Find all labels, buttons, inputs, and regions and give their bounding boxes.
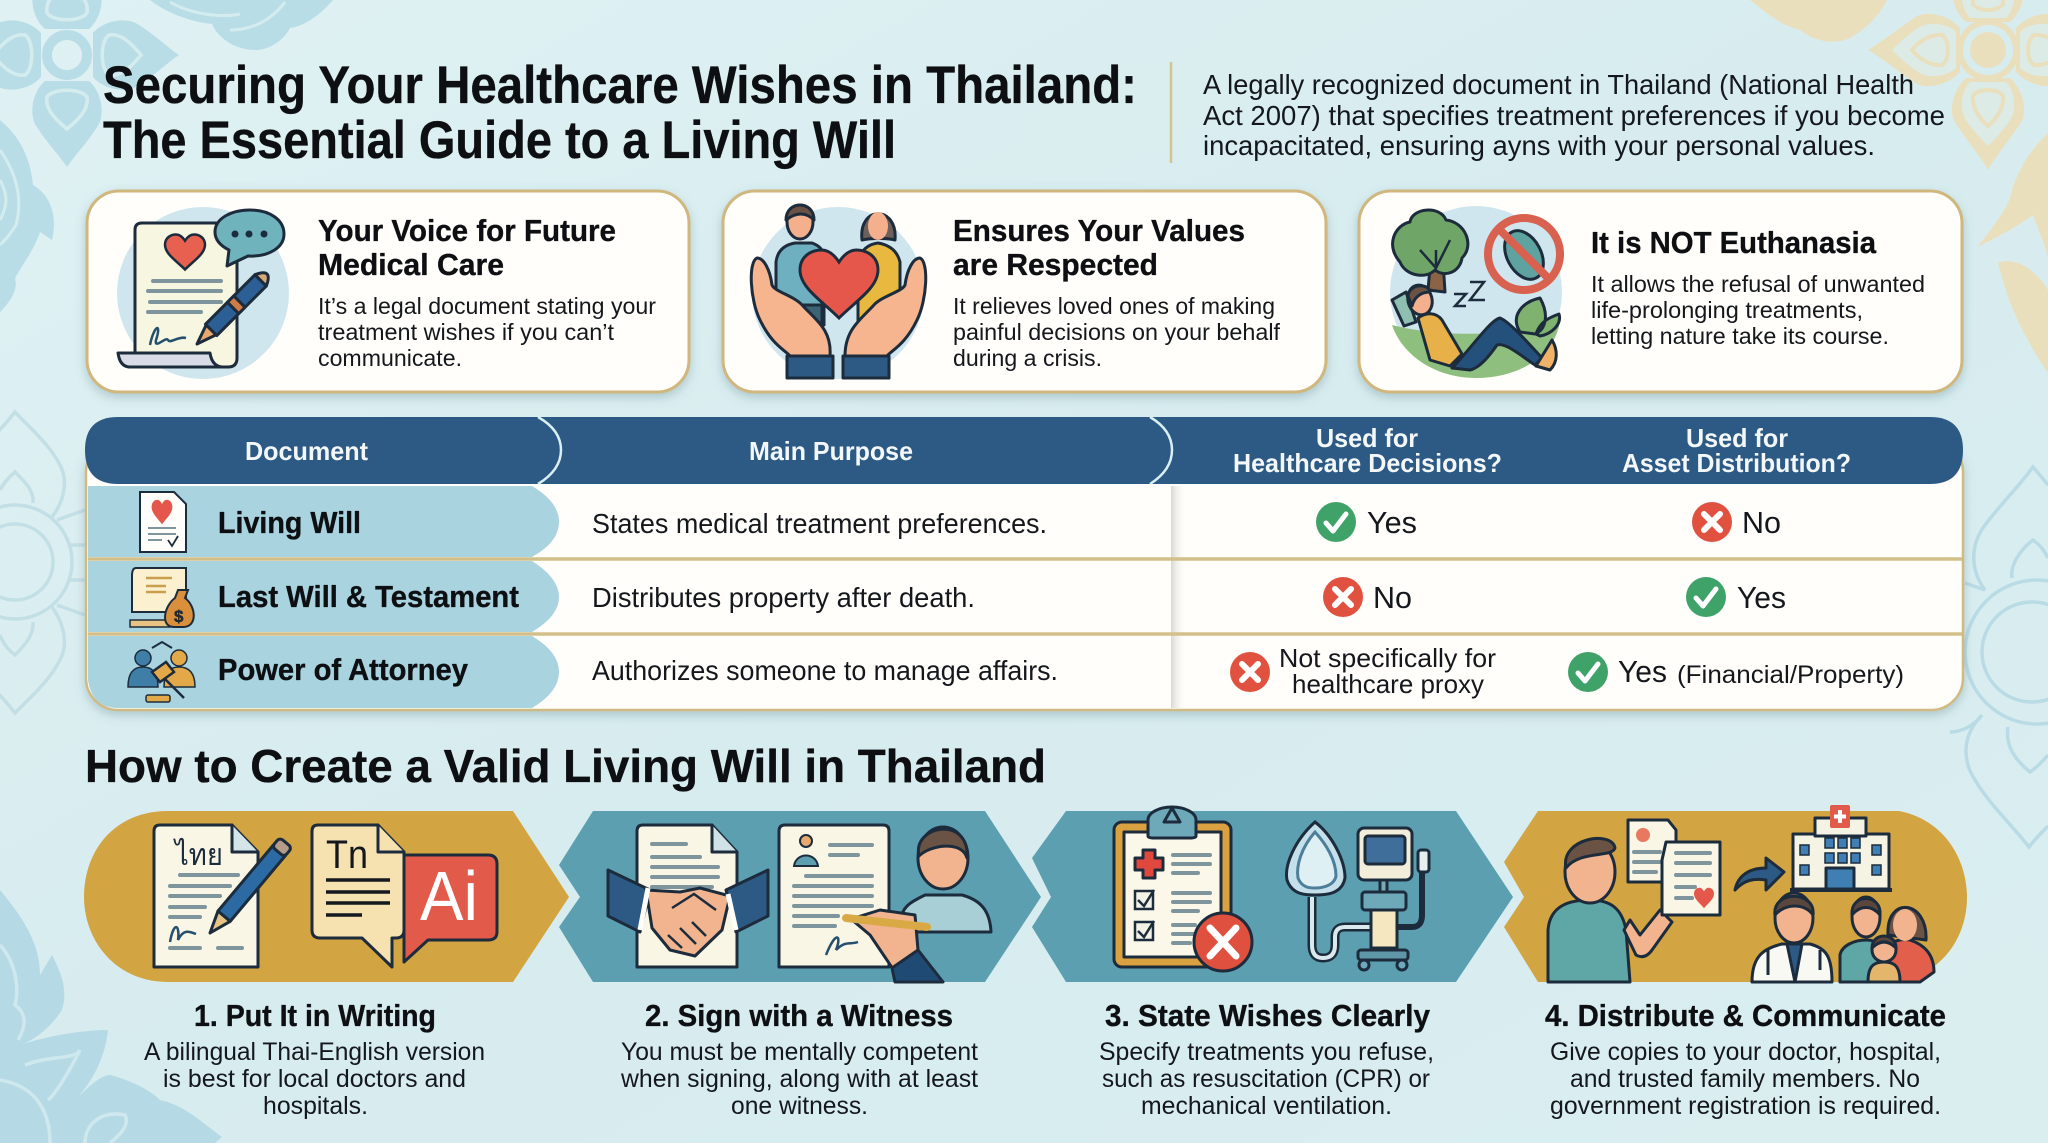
step 1 text — [144, 998, 485, 1120]
table header: Document — [245, 436, 368, 466]
body text: letting nature take its course. — [1591, 323, 1889, 349]
step 1 text: hospitals. — [263, 1092, 368, 1120]
body text — [318, 293, 656, 371]
step 3 text: such as resuscitation (CPR) or — [1102, 1065, 1430, 1093]
step 1: put it in writing — [84, 811, 569, 982]
step 4 text: and trusted family members. No — [1570, 1065, 1920, 1093]
panel: not euthanasia — [1359, 191, 1962, 392]
icon: scroll and money bag: $ — [174, 607, 184, 626]
body text — [1591, 271, 1925, 349]
step 2 text — [620, 998, 978, 1120]
icon: bilingual documents: Tn — [326, 833, 368, 877]
intro description: Act 2007) that specifies treatment preferences if you become — [1203, 100, 1945, 131]
table header: Used for — [1316, 423, 1418, 453]
row: power of attorney: healthcare proxy — [1292, 669, 1484, 699]
row: power of attorney: Yes — [1618, 654, 1667, 689]
table header: Asset Distribution? — [1622, 448, 1851, 478]
step 4 text — [1545, 998, 1946, 1120]
row: power of attorney: Power of Attorney — [218, 652, 469, 687]
row: last will: Yes — [1737, 580, 1786, 615]
table header — [85, 417, 1963, 484]
icon: sharing copies — [1548, 820, 1784, 982]
row: living will: States medical treatment preferences. — [592, 508, 1047, 539]
body text: painful decisions on your behalf — [953, 319, 1281, 345]
icon: doctor and family — [1752, 893, 1934, 982]
step 3 text: Specify treatments you refuse, — [1099, 1038, 1434, 1066]
step 1 text: A bilingual Thai-English version — [144, 1038, 485, 1066]
icon: bilingual documents: ไทย — [173, 837, 223, 872]
title: Securing Your Healthcare Wishes in Thailand: — [103, 56, 1137, 115]
row: last will: No — [1373, 580, 1412, 615]
icon: handshake and witness signing — [608, 825, 991, 982]
body text: It allows the refusal of unwanted — [1591, 271, 1925, 297]
step 2 text: You must be mentally competent — [621, 1038, 978, 1066]
row: living will: No — [1742, 505, 1781, 540]
body text: communicate. — [318, 345, 462, 371]
title: The Essential Guide to a Living Will — [103, 111, 896, 170]
body text: It relieves loved ones of making — [953, 293, 1275, 319]
comparison table — [85, 417, 1963, 710]
step 1 text: is best for local doctors and — [163, 1065, 466, 1093]
step 2 text: 2. Sign with a Witness — [645, 998, 953, 1033]
step 4 text: government registration is required. — [1550, 1092, 1941, 1120]
intro description: incapacitated, ensuring ayns with your personal values. — [1203, 130, 1875, 161]
body text: It’s a legal document stating your — [318, 293, 656, 319]
panel: your voice — [87, 191, 689, 392]
step 3: state wishes clearly — [1032, 807, 1513, 982]
heading: Ensures Your Values — [953, 213, 1245, 248]
table header: Healthcare Decisions? — [1233, 448, 1502, 478]
table header: Used for — [1686, 423, 1788, 453]
step 4 text: Give copies to your doctor, hospital, — [1550, 1038, 1941, 1066]
icon: document with pen and speech bubble — [117, 207, 289, 379]
body text — [953, 293, 1281, 371]
step 3 text: mechanical ventilation. — [1141, 1092, 1392, 1120]
title — [103, 56, 1137, 170]
step 2 text: when signing, along with at least — [620, 1065, 978, 1093]
step 2 text: one witness. — [731, 1092, 868, 1120]
row: living will: Yes — [1367, 505, 1417, 540]
row: last will: Distributes property after death. — [592, 582, 975, 613]
icon: living will document — [140, 492, 186, 552]
row: power of attorney: Not specifically for — [1279, 643, 1496, 673]
heading: It is NOT Euthanasia — [1591, 225, 1877, 260]
row: power of attorney: (Financial/Property) — [1677, 661, 1904, 689]
row: power of attorney — [128, 642, 1904, 702]
heading: Medical Care — [318, 247, 504, 282]
row: power of attorney: Authorizes someone to manage affairs. — [592, 655, 1058, 686]
body text: life-prolonging treatments, — [1591, 297, 1863, 323]
body text: during a crisis. — [953, 345, 1102, 371]
step 3 text — [1099, 998, 1434, 1120]
step 4: distribute and communicate — [1504, 805, 1967, 982]
heading: are Respected — [953, 247, 1158, 282]
heading — [318, 213, 616, 282]
icon: person resting under tree, no mask — [1390, 206, 1562, 378]
icon: bilingual documents — [154, 825, 497, 967]
intro description — [1171, 62, 1945, 163]
icon: two people with gavel — [128, 642, 195, 702]
heading — [953, 213, 1245, 282]
icon: hands holding heart and couple — [751, 205, 926, 379]
heading: Your Voice for Future — [318, 213, 616, 248]
step 2: sign with a witness — [559, 811, 1041, 982]
step 1 text: 1. Put It in Writing — [194, 998, 436, 1033]
icon: bilingual documents: Ai — [420, 857, 478, 935]
intro description: A legally recognized document in Thailand (National Health — [1203, 69, 1914, 100]
row: last will — [130, 568, 1786, 627]
step 3 text: 3. State Wishes Clearly — [1105, 998, 1431, 1033]
section heading: How to Create a Valid Living Will in Thailand — [85, 740, 1046, 792]
step 4 text: 4. Distribute & Communicate — [1545, 998, 1946, 1033]
table header: Main Purpose — [749, 436, 913, 466]
icon: scroll and money bag — [130, 568, 194, 627]
icon: clipboard with refusal mark — [1114, 807, 1252, 971]
icon: hospital — [1790, 805, 1892, 890]
body text: treatment wishes if you can’t — [318, 319, 615, 345]
row: last will: Last Will & Testament — [218, 579, 519, 614]
row: living will — [140, 492, 1781, 552]
icon: oxygen mask and ventilator — [1287, 822, 1429, 970]
panel: values — [723, 191, 1326, 392]
row: living will: Living Will — [218, 505, 361, 540]
